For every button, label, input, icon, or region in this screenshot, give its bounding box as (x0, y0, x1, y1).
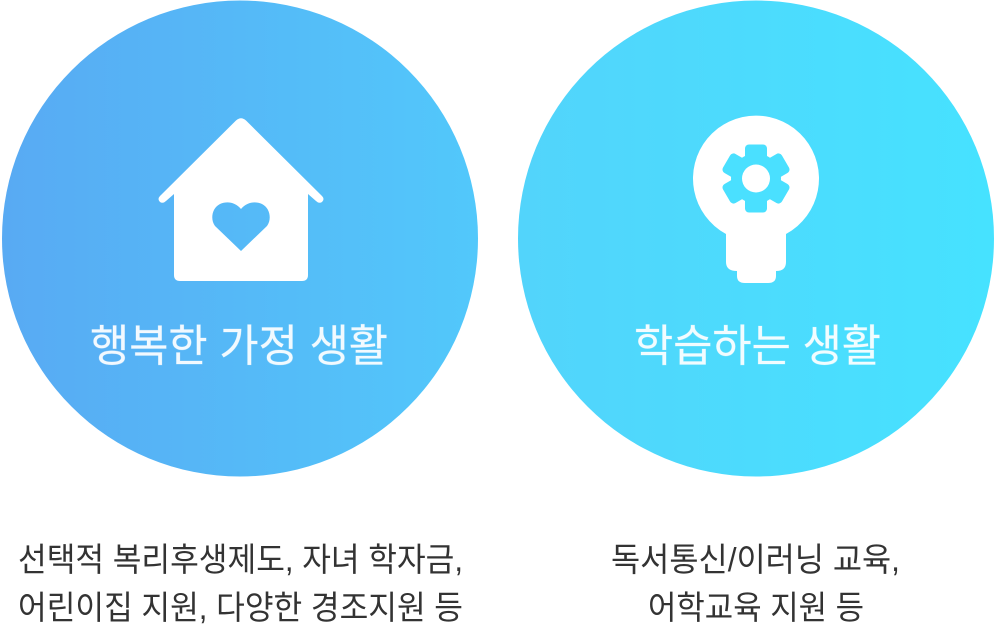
panel: learning life (518, 0, 994, 476)
circle: blue background (2, 0, 478, 476)
icon: house with heart (158, 118, 324, 281)
icon: light bulb with gear (693, 116, 819, 283)
circle: cyan background (518, 0, 994, 476)
text block: family life benefits: 선택적 복리후생제도, 자녀 학자금, (18, 541, 463, 578)
heading: learning life: 학습하는 생활 (634, 322, 881, 371)
text block: learning benefits: 독서통신/이러닝 교육, (611, 541, 900, 578)
text block: learning benefits (611, 541, 900, 626)
text block: family life benefits: 어린이집 지원, 다양한 경조지원 등 (18, 589, 463, 626)
heading: happy family life: 행복한 가정 생활 (90, 322, 388, 371)
panel: happy family life (2, 0, 478, 476)
text block: family life benefits (18, 541, 463, 626)
text block: learning benefits: 어학교육 지원 등 (648, 589, 864, 626)
